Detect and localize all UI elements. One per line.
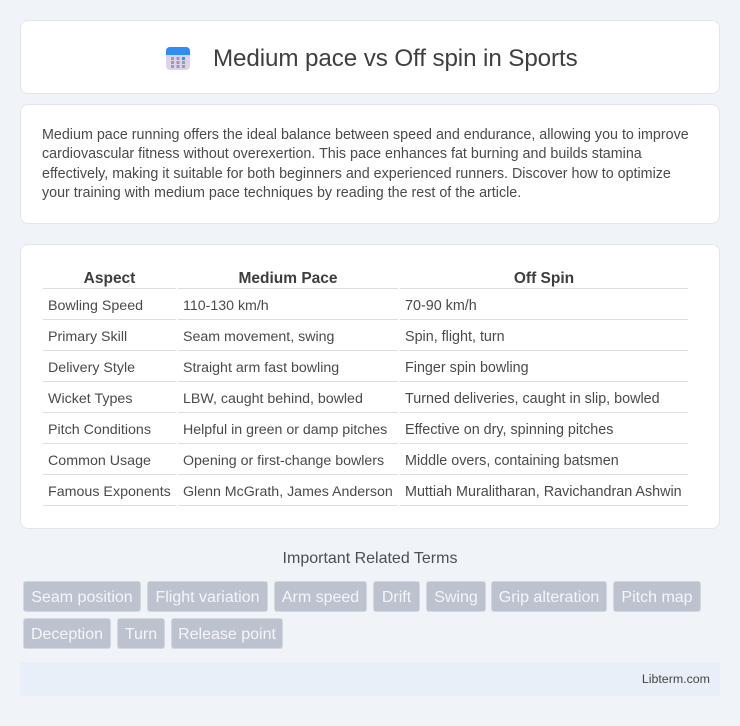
intro paragraph: your training with medium pace techniques by reading the rest of the article.	[42, 185, 521, 201]
tag: pitch map: Pitch map	[621, 589, 693, 606]
row: common usage	[48, 453, 619, 469]
row: famous exponents	[48, 484, 682, 500]
row: wicket types	[48, 391, 660, 407]
tag: release point: Release point	[178, 626, 276, 643]
row: famous exponents: Muttiah Muralitharan, Ravichandran Ashwin	[405, 484, 682, 500]
table header: Medium Pace	[238, 270, 338, 287]
tag: swing: Swing	[434, 589, 478, 606]
intro paragraph	[42, 127, 689, 201]
tag: release point	[171, 618, 283, 649]
row: famous exponents: Glenn McGrath, James Anderson	[183, 484, 393, 500]
tag: seam position	[23, 581, 141, 612]
tag: turn: Turn	[125, 626, 157, 643]
row: pitch conditions: Pitch Conditions	[48, 422, 151, 438]
row: delivery style: Finger spin bowling	[405, 360, 529, 376]
table header: Off Spin	[514, 270, 574, 287]
comparison table card	[20, 244, 720, 529]
row: delivery style	[48, 360, 529, 376]
row: common usage: Opening or first-change bowlers	[183, 453, 384, 469]
row: primary skill: Primary Skill	[48, 329, 127, 345]
tag: deception: Deception	[31, 626, 103, 643]
tag: deception	[23, 618, 111, 649]
tag: drift	[373, 581, 420, 612]
intro paragraph: cardiovascular fitness without overexertion. This pace enhances fat burning and builds stamina	[42, 146, 642, 162]
row: wicket types: LBW, caught behind, bowled	[183, 391, 363, 407]
row: wicket types: Wicket Types	[48, 391, 132, 407]
intro paragraph: effectively, making it suitable for both beginners and experienced runners. Discover how to optimize	[42, 166, 671, 182]
row: common usage: Common Usage	[48, 453, 151, 469]
tag: swing	[426, 581, 486, 612]
table header: Aspect	[84, 270, 135, 287]
tag: arm speed	[274, 581, 367, 612]
tag: drift: Drift	[382, 589, 411, 606]
row: pitch conditions: Effective on dry, spinning pitches	[405, 422, 613, 438]
tag: grip alteration: Grip alteration	[499, 589, 599, 606]
related terms heading: Important Related Terms	[283, 550, 457, 567]
title: Medium pace vs Off spin in Sports	[213, 45, 578, 72]
row: pitch conditions: Helpful in green or damp pitches	[183, 422, 387, 438]
row: famous exponents: Famous Exponents	[48, 484, 171, 500]
related term tags	[23, 581, 701, 649]
row: bowling speed: 70-90 km/h	[405, 298, 477, 314]
row: common usage: Middle overs, containing batsmen	[405, 453, 619, 469]
footer source: Libterm.com	[642, 672, 710, 686]
tag: flight variation: Flight variation	[155, 589, 260, 606]
tag: grip alteration	[491, 581, 607, 612]
tag: pitch map	[613, 581, 701, 612]
title card	[20, 20, 720, 94]
row: bowling speed: Bowling Speed	[48, 298, 143, 314]
row: delivery style: Delivery Style	[48, 360, 135, 376]
table header	[84, 270, 574, 287]
row: bowling speed: 110-130 km/h	[183, 298, 269, 314]
tag: arm speed: Arm speed	[282, 589, 359, 606]
tag: flight variation	[147, 581, 268, 612]
row: delivery style: Straight arm fast bowling	[183, 360, 339, 376]
row: primary skill: Seam movement, swing	[183, 329, 334, 345]
row: pitch conditions	[48, 422, 613, 438]
intro paragraph: Medium pace running offers the ideal balance between speed and endurance, allowing you to improve	[42, 127, 689, 143]
row: primary skill	[48, 329, 505, 345]
row: wicket types: Turned deliveries, caught in slip, bowled	[405, 391, 660, 407]
row: primary skill: Spin, flight, turn	[405, 329, 505, 345]
footer bar	[20, 662, 720, 696]
tag: turn	[117, 618, 165, 649]
icon: calendar	[166, 47, 190, 70]
tag: seam position: Seam position	[31, 589, 133, 606]
row: bowling speed	[48, 298, 477, 314]
intro text card	[20, 104, 720, 224]
